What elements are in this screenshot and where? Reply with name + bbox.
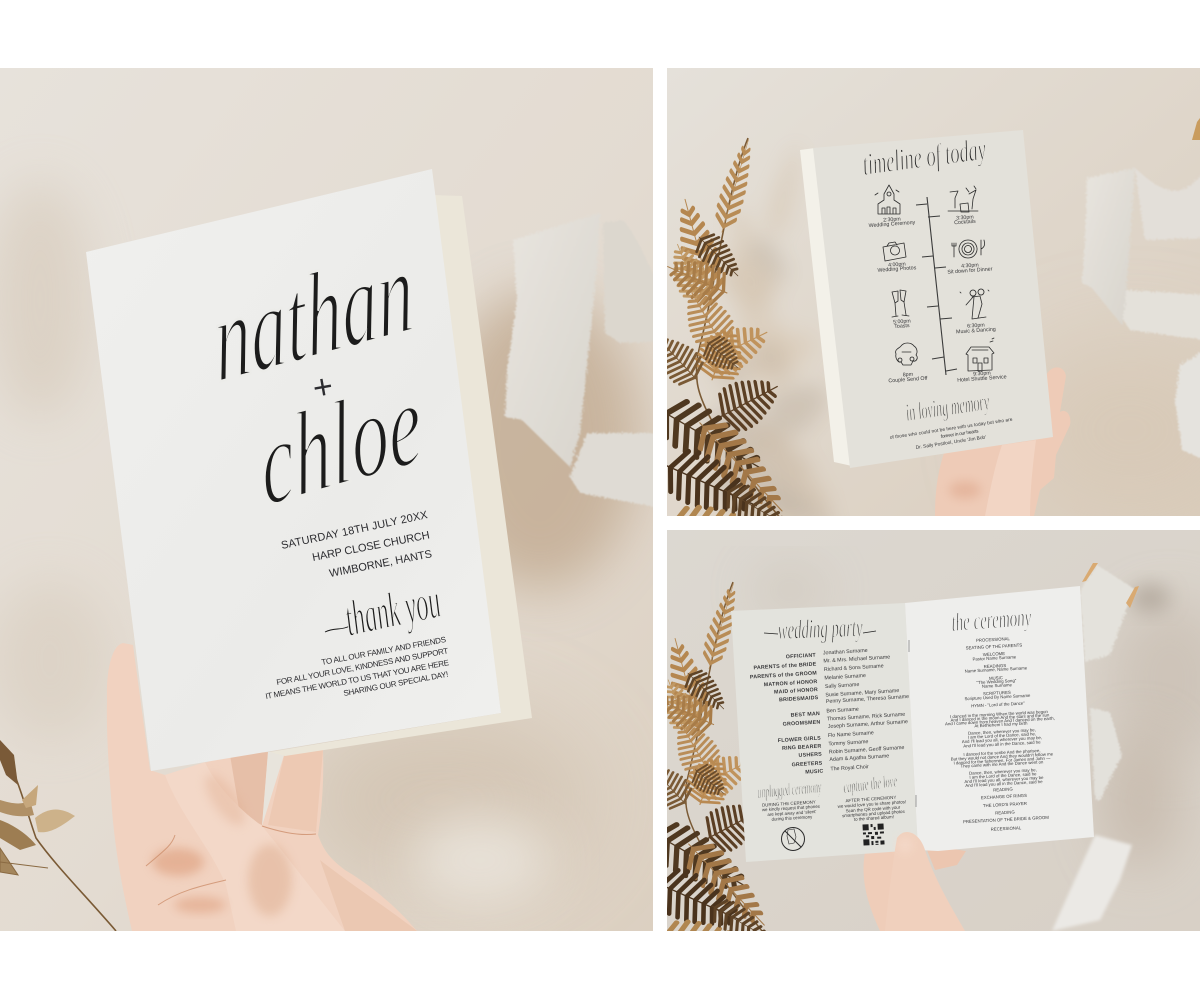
order of service: And I'll lead you all, wherever you may be <box>964 775 1044 784</box>
order of service: HYMN - "Lord of the Dance" <box>971 701 1025 708</box>
roles column: MATRON of HONOR <box>764 679 818 688</box>
order of service: MUSIC <box>989 675 1003 681</box>
capture the love note: AFTER THE CEREMONY <box>845 795 897 803</box>
timeline labels: Wedding Photos <box>877 265 917 274</box>
icon: flutes <box>892 290 909 317</box>
names <box>218 272 418 502</box>
order of service: SCRIPTURES <box>983 690 1011 696</box>
date and venue: WIMBORNE, HANTS <box>328 548 434 580</box>
names column: Joseph Surname, Arthur Surname <box>828 719 908 730</box>
order of service: Dance, then, wherever you may be, <box>969 767 1037 776</box>
icon: hotel <box>966 338 994 371</box>
card back page <box>800 148 852 466</box>
names: + <box>310 367 336 408</box>
panel: booklet photo <box>667 530 1200 931</box>
date and venue <box>280 509 434 580</box>
order of service: I danced for the fishermen, For James and John — <box>953 755 1051 766</box>
order of service: And I danced in the moon And the stars and the sun <box>950 712 1050 723</box>
memorial text: forever in our hearts <box>940 428 979 440</box>
unplugged ceremony note: are kept away and 'silent' <box>767 809 817 817</box>
heading: the ceremony <box>950 602 1032 637</box>
capture the love note: to the shared album! <box>854 814 894 822</box>
roles column: BRIDESMAIDS <box>779 695 819 703</box>
order of service: READINGS <box>984 663 1006 669</box>
capture the love note: smartphones and upload photos <box>842 809 906 818</box>
order of service: Pastor Name Surname <box>972 654 1017 662</box>
timeline axis <box>916 197 957 375</box>
names column: Ben Surname <box>826 707 859 714</box>
unplugged ceremony note: during this ceremony <box>771 814 813 822</box>
icon: car <box>896 343 917 365</box>
roles column: MAID of HONOR <box>774 687 818 696</box>
order of service: At Bethlehem I had my birth <box>974 721 1028 728</box>
order of service: I danced in the morning When the world was begun <box>950 709 1049 719</box>
order of service: They came with me And the Dance went on <box>960 759 1044 769</box>
thank you heading <box>324 592 440 636</box>
thank you heading: thank you <box>340 572 445 647</box>
order of service: "The Wedding Song" <box>976 678 1017 685</box>
timeline labels: 2:30pm <box>883 216 902 224</box>
panel: timeline photo <box>667 68 1200 516</box>
names: nathan <box>209 223 418 408</box>
names column: Thomas Surname, Rick Surname <box>827 712 905 722</box>
thumb over booklet <box>885 832 965 931</box>
order of service: READING <box>995 809 1015 816</box>
hand behind booklet <box>863 845 966 931</box>
order of service: READING <box>993 786 1013 793</box>
timeline labels: Toasts <box>894 323 910 330</box>
hand holding card <box>107 643 417 931</box>
panel: cover photo <box>0 68 655 931</box>
order of service: And I'll lead you all in the Dance, said he <box>963 739 1041 749</box>
timeline labels: Music & Dancing <box>956 327 996 335</box>
names column: Tommy Surname <box>828 739 869 747</box>
shadow of ribbon <box>1130 584 1170 612</box>
roles column: GREETERS <box>791 760 823 768</box>
thank you message: SHARING OUR SPECIAL DAY! <box>343 670 450 698</box>
booklet: wedding party page <box>731 603 918 862</box>
timeline labels: 3:30pm <box>956 214 975 222</box>
names column: Jonathan Surname <box>823 648 868 656</box>
thank you message: IT MEANS THE WORLD TO US THAT YOU ARE HERE <box>265 658 450 701</box>
ribbon <box>505 213 655 507</box>
order of service: I am the Lord of the Dance, said he, <box>968 731 1036 740</box>
order of service: And I came down from heaven And I danced on the earth, <box>945 716 1055 726</box>
roles column: FLOWER GIRLS <box>778 735 821 744</box>
card back page <box>270 195 532 756</box>
order of service: WELCOME <box>983 651 1005 657</box>
order of service: And I'll lead you all, wherever you may be, <box>962 735 1042 744</box>
timeline labels: Hotel Shuttle Service <box>957 374 1007 384</box>
names column: Susie Surname, Mary Surname <box>825 688 899 698</box>
order of service <box>945 636 1055 832</box>
roles column: PARENTS of the GROOM <box>750 670 817 681</box>
card front <box>86 169 501 771</box>
timeline labels: 5:00pm <box>893 318 912 326</box>
roles column: RING BEARER <box>782 744 822 752</box>
names column: Mr. & Mrs. Michael Surname <box>823 654 890 664</box>
order of service: SEATING OF THE PARENTS <box>966 643 1022 650</box>
thank you message <box>265 635 450 701</box>
fern <box>667 582 766 931</box>
hand <box>935 367 1070 516</box>
roles column: MUSIC <box>805 769 824 776</box>
order of service: Name Surname, Name Surname <box>965 665 1028 674</box>
timeline labels: Couple Send Off <box>888 376 928 384</box>
order of service: I am the Lord of the Dance, said he <box>969 771 1037 780</box>
timeline labels: 4:30pm <box>961 262 980 270</box>
QR code <box>862 823 885 846</box>
capture the love note: we would love you to share photos! <box>838 799 906 809</box>
roles column: BEST MAN <box>790 711 820 719</box>
date and venue: SATURDAY 18TH JULY 20XX <box>280 509 429 552</box>
date and venue: HARP CLOSE CHURCH <box>311 529 431 564</box>
order of service: Name Surname <box>982 682 1013 689</box>
fern <box>667 138 834 516</box>
roles column <box>750 652 824 776</box>
icon: no phones <box>782 828 804 850</box>
unplugged ceremony note: DURING THE CEREMONY <box>762 799 816 808</box>
names column: Robin Surname, Geoff Surname <box>829 745 905 755</box>
ribbons <box>1052 563 1139 931</box>
order of service: Scripture Used By Name Surname <box>964 693 1031 701</box>
names column: Richard & Sons Surname <box>824 663 884 673</box>
timeline labels: 6:30pm <box>967 322 986 330</box>
names column: Sally Surname <box>825 682 860 690</box>
unplugged ceremony note <box>758 783 822 821</box>
memorial text: Dr. Sally Postlool, Uncle 'Jim Bob' <box>915 435 987 451</box>
names column: The Royal Choir <box>830 764 869 772</box>
icon: camera <box>883 242 906 261</box>
booklet: wedding party page: unplugged ceremony <box>757 776 822 802</box>
timeline labels: 9:30pm <box>973 370 992 378</box>
timeline labels: 8pm <box>903 372 914 378</box>
order of service: PROCESSIONAL <box>976 636 1011 643</box>
names: chloe <box>254 354 427 532</box>
icon: cocktails <box>948 186 978 212</box>
order of service: PRESENTATION OF THE BRIDE & GROOM <box>963 815 1049 824</box>
thank you message: TO ALL OUR FAMILY AND FRIENDS <box>321 635 447 667</box>
timeline labels: Wedding Ceremony <box>868 220 916 229</box>
ribbon <box>1082 168 1200 460</box>
order of service: EXCHANGE OF RINGS <box>981 793 1027 800</box>
heading: wedding party <box>777 612 863 645</box>
roles column: GROOMSMEN <box>783 720 821 728</box>
order of service: RECESSIONAL <box>991 825 1022 832</box>
booklet: ceremony page <box>905 586 1094 851</box>
order of service: Dance, then, wherever you may be, <box>968 727 1036 736</box>
capture the love note: Scan the QR code with your <box>845 805 901 813</box>
timeline labels: Cocktails <box>954 219 976 226</box>
card: timeline of today: in loving memory <box>904 388 991 427</box>
order of service: But they would not dance And they wouldn't follow me <box>951 751 1054 762</box>
names column: Penny Surname, Theresa Surname <box>826 694 909 705</box>
names column: Adam & Agatha Surname <box>829 753 889 763</box>
capture the love note <box>838 771 906 822</box>
order of service: I danced for the scribe And the pharisee, <box>963 748 1041 757</box>
timeline labels: Sit down for Dinner <box>947 266 993 276</box>
timeline labels: 4:00pm <box>888 261 907 269</box>
thank you message: FOR ALL YOUR LOVE, KINDNESS AND SUPPORT <box>276 646 449 687</box>
icon: church <box>875 185 900 214</box>
icon: dancing couple <box>960 289 989 319</box>
names column: Melanie Surname <box>824 673 866 681</box>
timeline labels <box>868 214 1007 384</box>
names column <box>823 648 909 772</box>
heading: timeline of today <box>860 131 988 182</box>
order of service: And I'll lead you all in the Dance, said he <box>965 779 1043 788</box>
order of service: THE LORD'S PRAYER <box>983 801 1027 808</box>
names column: Flo Name Surname <box>828 730 874 739</box>
heading <box>764 620 876 643</box>
icon: place setting <box>952 240 985 258</box>
capture the love note: capture the love <box>842 771 898 797</box>
roles column: OFFICIANT <box>786 652 817 660</box>
memorial text: of those who could not be here with us today but who are <box>889 417 1013 441</box>
roles column: PARENTS of the BRIDE <box>753 661 817 671</box>
card: timeline of today <box>813 130 1053 468</box>
unplugged ceremony note: we kindly request that phones <box>762 804 821 812</box>
dried plant <box>0 740 116 931</box>
roles column: USHERS <box>798 751 822 759</box>
